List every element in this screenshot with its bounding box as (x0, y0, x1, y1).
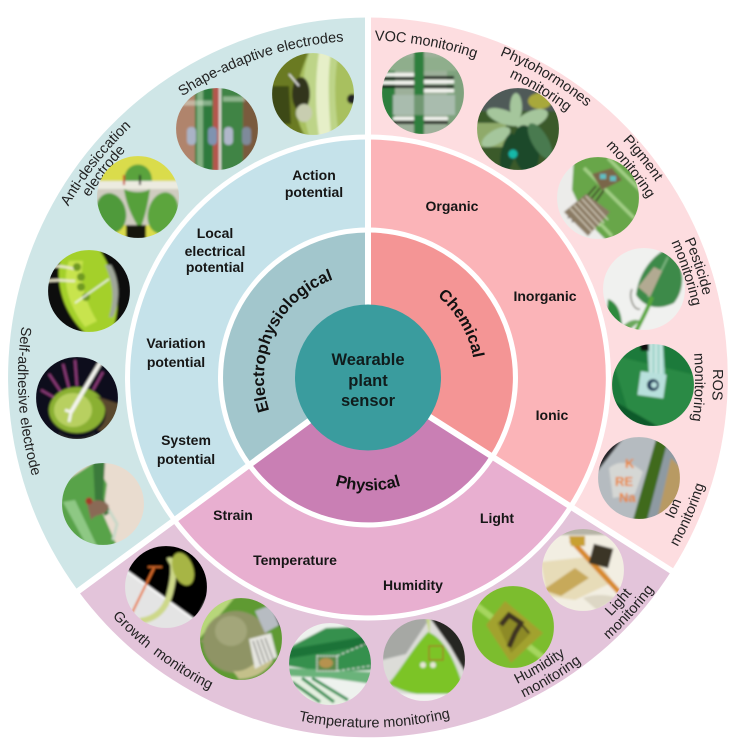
text: Local electrical potential: Local (197, 225, 233, 241)
label: Self-adhesive electrode: Self-adhesive electrode (18, 327, 40, 476)
photo: ion sensor on stem: Na (619, 490, 636, 505)
label: VOC monitoring: VOC monitoring (375, 30, 478, 60)
label: Light: Light (604, 588, 632, 616)
center title: Wearable (331, 351, 405, 369)
label: Ion: Ion (665, 500, 682, 518)
photo: temperature sensor on green leaf (382, 618, 466, 702)
panel: inner ring sectors (223, 232, 513, 522)
label: monitoring (pigment): monitoring (606, 141, 654, 199)
label: monitoring (light): monitoring (604, 586, 655, 639)
photo: self-adhesive electrode on Venus flytrap (35, 356, 119, 440)
center title: plant (348, 372, 388, 390)
label: monitoring (pesticide): monitoring (672, 240, 700, 306)
photo: ROS sensor on leaf (611, 343, 695, 427)
label: monitoring (phytohormones): monitoring (510, 70, 571, 112)
text: Variation potential: Variation (146, 335, 206, 351)
photo: pesticide sensor on leaf (602, 247, 686, 331)
heading: Chemical: Chemical (440, 290, 485, 358)
photo: ion sensor on stem: K (625, 456, 635, 471)
text: Light: Light (480, 510, 514, 526)
label: monitoring (ion): monitoring (671, 483, 706, 546)
label: Anti-desiccation: Anti-desiccation (62, 122, 130, 206)
photo: temperature sensor on striped leaf (288, 622, 372, 706)
label: Humidity: Humidity (514, 649, 564, 684)
text: Strain: Strain (213, 507, 253, 523)
photo: ion sensor on stem (597, 436, 681, 520)
center title: sensor (341, 392, 396, 410)
label: monitoring (ROS): monitoring (690, 354, 706, 421)
photo: strain sensor on fruit (199, 597, 283, 681)
text: Ionic: Ionic (536, 407, 569, 423)
photo: VOC sensor on leaf (381, 51, 465, 135)
label: electrode: electrode (84, 147, 124, 196)
label: Pesticide: Pesticide (685, 237, 711, 294)
panel: middle ring sectors (130, 140, 606, 615)
heading: Physical: Physical (336, 474, 400, 494)
text: Local electrical potential: potential (186, 259, 244, 275)
photo: light sensor on glove (541, 528, 625, 612)
label: Pigment: Pigment (624, 134, 662, 182)
photo: electrode on mimosa stem (61, 462, 145, 546)
text: Temperature: Temperature (253, 552, 337, 568)
center circle: wearable plant sensor (295, 304, 441, 450)
text: Humidity: Humidity (383, 577, 443, 593)
text: System potential: System (161, 432, 211, 448)
photo: ion sensor on stem: RE (615, 474, 633, 489)
text: Organic: Organic (426, 198, 479, 214)
heading: Electrophysiological: Electrophysiological (253, 268, 332, 413)
label: Temperature monitoring: Temperature monitoring (300, 710, 450, 728)
text: Local electrical potential: electrical (185, 243, 245, 259)
photo: phytohormone sensor on plant (476, 87, 560, 175)
photo: seedling growth with orange arrow (124, 545, 208, 629)
label: Shape-adaptive electrodes: Shape-adaptive electrodes (178, 32, 343, 95)
label: Growth monitoring: Growth monitoring (114, 612, 212, 691)
label: ROS: ROS (712, 370, 724, 400)
text: Inorganic: Inorganic (513, 288, 577, 304)
label: Phytohormones: Phytohormones (500, 46, 590, 106)
photo: pigment sensor on leaf (556, 156, 640, 240)
text: Action potential: Action (292, 167, 336, 183)
photo: shape-adaptive electrode on hairy stem (271, 52, 357, 136)
photo: electrodes on green stems (175, 87, 259, 171)
photo: humidity sensor on leaf (471, 585, 555, 669)
label: monitoring (humidity): monitoring (521, 656, 582, 698)
photo: anti-desiccation electrode on leaf (97, 156, 179, 238)
text: Variation potential: potential (147, 354, 205, 370)
photo: conformable electrode on flytrap lobe (47, 249, 131, 333)
text: Action potential: potential (285, 184, 343, 200)
text: System potential: potential (157, 451, 215, 467)
